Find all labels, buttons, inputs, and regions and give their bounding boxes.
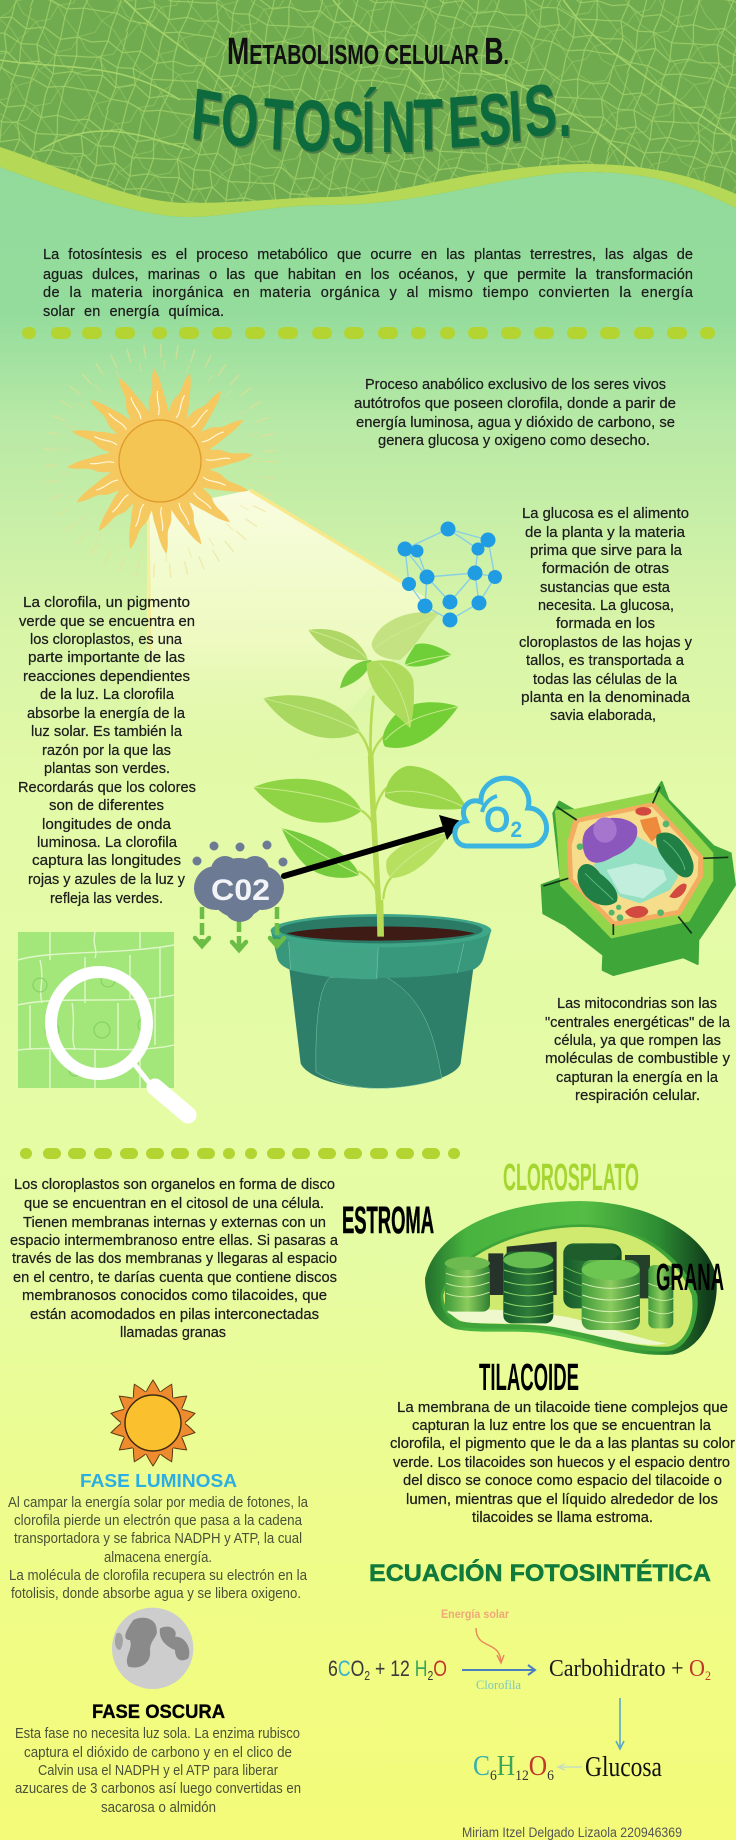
icon: plant cell xyxy=(542,782,735,975)
text: clorofila: plantas son verdes. xyxy=(44,761,170,777)
icon: glucose molecule xyxy=(398,522,502,628)
text: clorofila: parte importante de las xyxy=(28,650,185,666)
arrow: reaction xyxy=(462,1665,535,1675)
text: proceso anabólico: genera glucosa y oxigeno como desecho. xyxy=(378,433,650,449)
equation: glucosa: Glucosa xyxy=(585,1752,662,1783)
text: mitocondrias xyxy=(545,996,731,1104)
text: tilacoide: clorofila, el pigmento que le da a las plantas su color xyxy=(390,1436,735,1452)
text: cloroplastos: través de las dos membranas y llegaras al espacio xyxy=(12,1251,337,1267)
text: tilacoide: capturan la luz entre los que se encuentran la xyxy=(412,1418,712,1434)
text: fase luminosa xyxy=(8,1495,309,1602)
icon: CO2 cloud: C02 xyxy=(211,874,270,907)
text: cloroplastos: llamadas granas xyxy=(120,1325,226,1341)
text: proceso anabólico: energía luminosa, agua y dióxido de carbono, se xyxy=(356,415,675,431)
text: clorofila: Recordarás que los colores xyxy=(18,780,196,796)
text: mitocondrias: respiración celular. xyxy=(575,1088,700,1104)
text: tilacoide: lumen, mientras que el líquido alrededor de los xyxy=(406,1492,718,1508)
arrow: CO2 to O2 xyxy=(284,815,461,876)
icon: O2 cloud xyxy=(455,778,547,846)
heading: fase oscura: FASE OSCURA xyxy=(92,1702,225,1723)
text: fase luminosa: fotolisis, donde absorbe agua y se libera oxigeno. xyxy=(11,1586,301,1602)
icon: O2 cloud: 2 xyxy=(510,817,522,842)
icon: small sun xyxy=(109,1380,197,1466)
text: mitocondrias: capturan la energía en la xyxy=(556,1070,719,1086)
title: Metabolismo celular B.: METABOLISMO CELULAR B. xyxy=(227,31,509,73)
text: mitocondrias: célula, ya que rompen las xyxy=(554,1033,721,1049)
text: fase luminosa: transportadora y se fabrica NADPH y ATP, la cual xyxy=(14,1531,302,1547)
dotted divider 2 xyxy=(20,1148,460,1159)
equation: glucose formula: 6 xyxy=(490,1768,497,1784)
text: clorofila: son de diferentes xyxy=(49,798,164,814)
text: proceso anabólico: autótrofos que poseen clorofila, donde a parir de xyxy=(354,396,676,412)
icon: sun xyxy=(50,351,270,571)
text: clorofila: luminosa. La clorofila xyxy=(37,835,178,851)
equation: energy label: Energía solar xyxy=(441,1607,509,1621)
icon: plant xyxy=(253,612,467,935)
text: proceso anabólico: Proceso anabólico exclusivo de los seres vivos xyxy=(365,377,666,393)
header wave band xyxy=(0,147,736,217)
text: tilacoide: La membrana de un tilacoide tiene complejos que xyxy=(397,1400,728,1416)
text: tilacoide: tilacoides se llama estroma. xyxy=(472,1510,653,1526)
text: clorofila: luz solar. Es también la xyxy=(31,724,183,740)
text: fase luminosa: Al campar la energía solar por media de fotones, la xyxy=(8,1495,309,1511)
equation: reactants: + 12 xyxy=(370,1656,415,1681)
text: cloroplastos: están acomodados en pilas interconectadas xyxy=(30,1307,319,1323)
equation: products: Carbohidrato + O xyxy=(549,1656,706,1682)
text: glucosa: todas las células de la xyxy=(533,672,678,688)
text: clorofila: La clorofila, un pigmento xyxy=(23,595,190,611)
icon: chloroplast xyxy=(425,1201,717,1355)
text: clorofila: captura las longitudes xyxy=(32,853,181,869)
icon: moon xyxy=(112,1608,193,1689)
equation: reactants: O xyxy=(433,1656,447,1681)
text: fase luminosa: almacena energía. xyxy=(104,1550,212,1566)
text: cloroplastos: espacio intermembranoso entre ellas. Si pasaras a xyxy=(10,1233,339,1249)
text: cloroplastos: que se encuentran en el citosol de una célula. xyxy=(24,1196,324,1212)
equation: glucose formula: 6 xyxy=(547,1768,554,1784)
heading: fase luminosa: FASE LUMINOSA xyxy=(80,1470,237,1491)
text: glucosa: cloroplastos de las hojas y xyxy=(519,635,693,651)
infographic canvas: ESTROMA xyxy=(342,1200,434,1242)
equation: glucose formula: C xyxy=(473,1751,490,1782)
text: proceso anabólico xyxy=(354,377,676,449)
text: clorofila: los cloroplastos, es una xyxy=(30,632,183,648)
text: cloroplastos: Tienen membranas internas y externas con un xyxy=(23,1215,326,1231)
intro paragraph xyxy=(43,247,694,320)
text: glucosa: tallos, es transportada a xyxy=(526,653,685,669)
equation: reactants: 6CO xyxy=(328,1656,368,1681)
text: clorofila xyxy=(18,595,196,907)
text: cloroplastos: membranosos conocidos como tilacoides, que xyxy=(22,1288,327,1304)
text: glucosa: planta en la denominada xyxy=(521,690,691,706)
title: Fotosíntesis: FOTOSÍNTESIS. xyxy=(189,68,572,169)
text: fase oscura: sacarosa o almidón xyxy=(101,1800,216,1816)
text: fase oscura: Calvin usa el NADPH y el ATP para liberar xyxy=(38,1763,278,1779)
header leaf banner xyxy=(0,0,736,220)
text: clorofila: reacciones dependientes xyxy=(23,669,190,685)
text: tilacoide: verde. Los tilacoides son huecos y el espacio dentro xyxy=(393,1455,730,1471)
text: glucosa: necesita. La glucosa, xyxy=(538,598,674,614)
text: glucosa: formación de otras xyxy=(542,561,669,577)
equation: reactants: H xyxy=(415,1656,427,1681)
light beam xyxy=(147,490,430,770)
icon: green down arrows xyxy=(195,907,284,950)
text: glucosa: sustancias que esta xyxy=(540,580,671,596)
text: glucosa: prima que sirve para la xyxy=(530,543,683,559)
text: clorofila: verde que se encuentra en xyxy=(19,614,195,630)
text: glucosa: de la planta y la materia xyxy=(525,525,686,541)
text: clorofila: absorbe la energía de la xyxy=(27,706,186,722)
icon: plant pot xyxy=(271,900,491,1088)
text: fase luminosa: clorofila pierde un electrón que pasa a la cadena xyxy=(14,1513,303,1529)
icon: O2 cloud: O xyxy=(484,799,512,840)
icon: CO2 cloud xyxy=(192,840,288,922)
heading: ecuación fotosintética: ECUACIÓN FOTOSINTÉTICA xyxy=(369,1559,711,1587)
equation: products: 2 xyxy=(705,1668,711,1683)
text: fase oscura xyxy=(15,1726,301,1816)
text: cloroplastos: en el centro, te darías cuenta que contiene discos xyxy=(13,1270,337,1286)
text: tilacoide: del disco se conoce como espacio del tilacoide o xyxy=(403,1473,722,1489)
text: glucosa: savia elaborada, xyxy=(550,708,656,724)
equation: glucose formula: 12 xyxy=(515,1768,529,1784)
text: mitocondrias: "centrales energéticas" de la xyxy=(545,1015,731,1031)
arrow: energy curve xyxy=(476,1628,504,1663)
arrow: down xyxy=(616,1698,624,1749)
text: cloroplastos: Los cloroplastos son organelos en forma de disco xyxy=(14,1177,335,1193)
text: mitocondrias: moléculas de combustible y xyxy=(545,1051,731,1067)
text: cloroplastos xyxy=(10,1177,339,1341)
text: fase luminosa: La molécula de clorofila recupera su electrón en la xyxy=(9,1568,308,1584)
intro paragraph: solar en energía química. xyxy=(43,304,224,320)
text: tilacoide xyxy=(390,1400,735,1526)
text: fase oscura: azucares de 3 carbonos así luego convertidas en xyxy=(15,1781,301,1797)
intro paragraph: La fotosíntesis es el proceso metabólico que ocurre en las plantas terrestres, las algas de xyxy=(43,247,693,263)
intro paragraph: de la materia inorgánica en materia orgánica y al mismo tiempo convierten la energía xyxy=(43,285,694,301)
text: clorofila: de la luz. La clorofila xyxy=(40,687,175,703)
text: glucosa xyxy=(519,506,693,724)
text: glucosa: La glucosa es el alimento xyxy=(522,506,689,522)
intro paragraph: aguas dulces, marinas o las que habitan en los océanos, y que permite la transformación xyxy=(43,267,693,283)
text: clorofila: rojas y azules de la luz y xyxy=(28,872,186,888)
equation: glucose formula: O xyxy=(529,1751,547,1782)
credit: Miriam Itzel Delgado Lizaola 220946369 xyxy=(462,1825,682,1840)
text: fase oscura: captura el dióxido de carbono y en el clico de xyxy=(24,1745,292,1761)
arrow: glucose xyxy=(558,1764,582,1770)
text: fase oscura: Esta fase no necesita luz sola. La enzima rubisco xyxy=(15,1726,300,1742)
equation: reactants: 2 xyxy=(427,1668,433,1683)
infographic canvas: TILACOIDE xyxy=(479,1357,579,1399)
text: clorofila: longitudes de onda xyxy=(42,817,172,833)
equation diagram xyxy=(328,1607,711,1784)
text: clorofila: refleja las verdes. xyxy=(50,891,163,907)
text: mitocondrias: Las mitocondrias son las xyxy=(557,996,717,1012)
icon: leaf cell magnifier xyxy=(18,932,188,1115)
equation: chlorophyll label: Clorofila xyxy=(476,1677,521,1692)
equation: glucose formula: H xyxy=(497,1751,515,1782)
dotted divider 1 xyxy=(22,327,715,339)
text: clorofila: razón por la que las xyxy=(42,743,171,759)
equation: reactants: 2 xyxy=(364,1668,370,1683)
text: glucosa: formada en los xyxy=(556,616,655,632)
